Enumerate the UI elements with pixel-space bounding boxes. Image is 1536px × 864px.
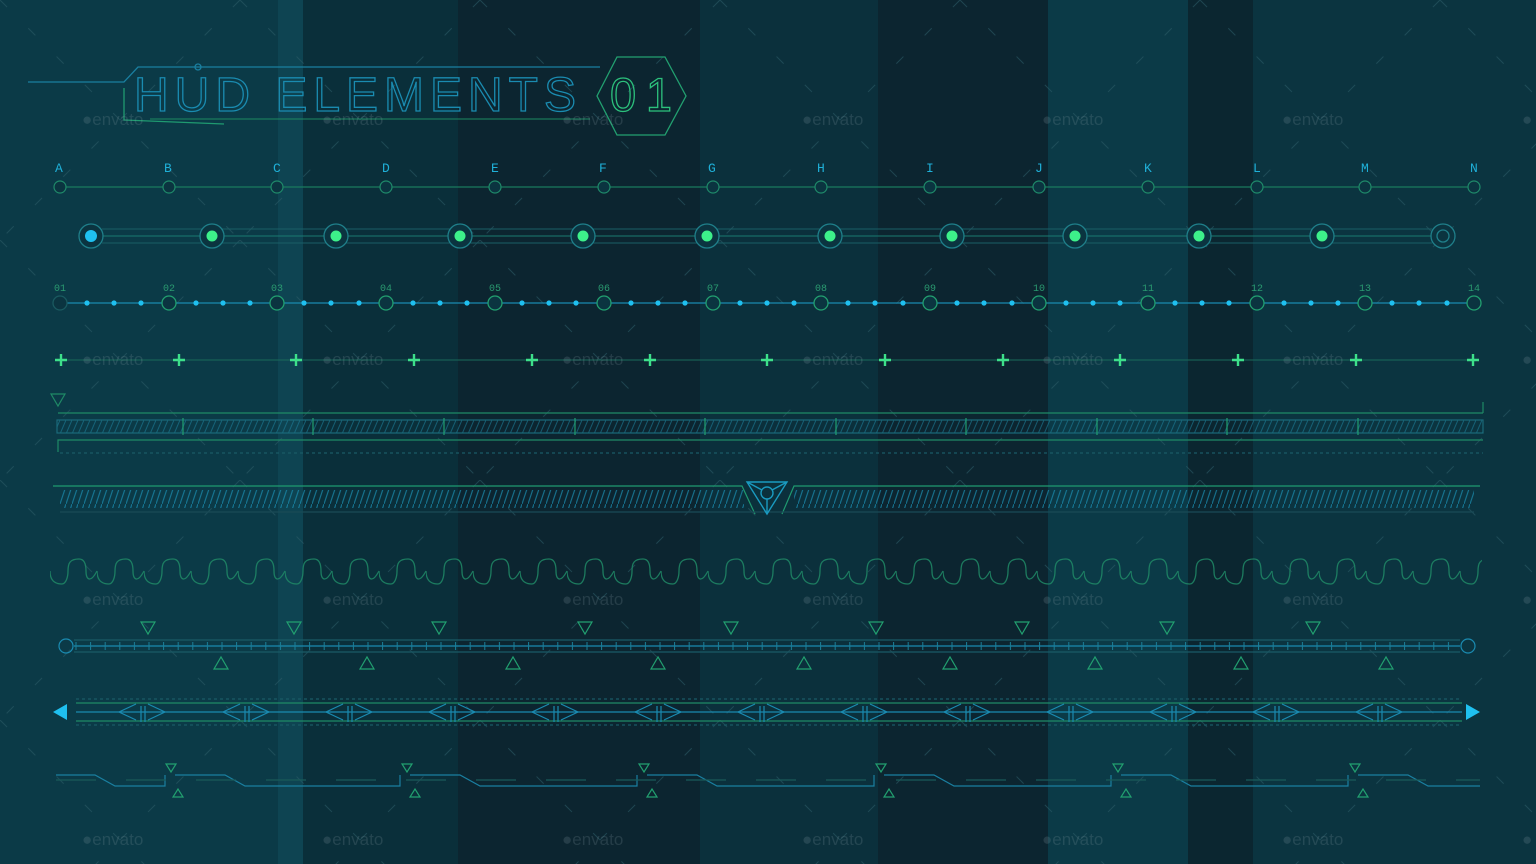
watermarks: ●envato [322,110,383,129]
segmented hatched bar [51,394,1483,453]
watermarks: ●envato [1042,830,1103,849]
watermarks: ●envato [82,830,143,849]
watermarks: ●envato [82,110,143,129]
watermarks: ●envato [322,590,383,609]
row: numbered scale: 13 [1359,284,1371,295]
watermarks: ●envato [802,350,863,369]
row: numbered scale: 14 [1468,284,1480,295]
row: lettered nodes: N [1470,161,1478,176]
watermarks: ●envato [322,350,383,369]
watermarks: ●envato [82,350,143,369]
row: lettered nodes: L [1253,161,1261,176]
row: lettered nodes: I [926,161,934,176]
watermarks: ●envato [1042,590,1103,609]
emblem bar [53,482,1480,514]
icon: triangle emblem [747,482,787,514]
watermarks: ●envato [1282,590,1343,609]
row: numbered scale: 09 [924,284,936,295]
title: HUD ELEMENTS [134,69,576,122]
watermarks: ●envato [1282,350,1343,369]
watermarks: ●envato [322,830,383,849]
circuit line [56,764,1480,797]
watermarks: ●envato [1042,110,1103,129]
watermarks: ●envato [82,590,143,609]
row: lettered nodes: F [599,161,607,176]
row: numbered scale: 01 [54,284,66,295]
row: glowing dots [79,224,1455,248]
watermarks: ●envato [562,590,623,609]
title: 01 [610,68,672,121]
watermarks: ● [1522,110,1532,129]
row: numbered scale: 08 [815,284,827,295]
watermarks: ●envato [562,830,623,849]
watermarks: ●envato [802,830,863,849]
watermarks: ●envato [1042,350,1103,369]
row: numbered scale: 05 [489,284,501,295]
ruler with triangles [59,622,1475,669]
row: numbered scale [53,284,1481,310]
row: lettered nodes: J [1035,161,1043,176]
arrow bar [53,699,1480,725]
wave [50,557,1482,587]
row: numbered scale: 04 [380,284,392,295]
row: lettered nodes: E [491,161,499,176]
row: numbered scale: 06 [598,284,610,295]
row: lettered nodes: G [708,161,716,176]
row: numbered scale: 11 [1142,284,1154,295]
row: numbered scale: 02 [163,284,175,295]
row: lettered nodes: D [382,161,390,176]
row: lettered nodes: A [55,161,63,176]
row: lettered nodes [54,161,1480,193]
row: numbered scale: 07 [707,284,719,295]
row: lettered nodes: H [817,161,825,176]
watermarks: ● [1522,350,1532,369]
watermarks: ●envato [562,350,623,369]
watermarks: ●envato [1282,110,1343,129]
row: numbered scale: 10 [1033,284,1045,295]
row: lettered nodes: B [164,161,172,176]
row: lettered nodes: K [1144,161,1152,176]
row: numbered scale: 03 [271,284,283,295]
row: lettered nodes: C [273,161,281,176]
watermarks: ●envato [802,590,863,609]
row: numbered scale: 12 [1251,284,1263,295]
watermarks: ●envato [1282,830,1343,849]
watermarks: ● [1522,590,1532,609]
watermarks: ● [1522,830,1532,849]
title [28,57,686,135]
watermarks: ●envato [562,110,623,129]
watermarks: ●envato [802,110,863,129]
row: lettered nodes: M [1361,161,1369,176]
row: plus markers [55,354,1479,366]
